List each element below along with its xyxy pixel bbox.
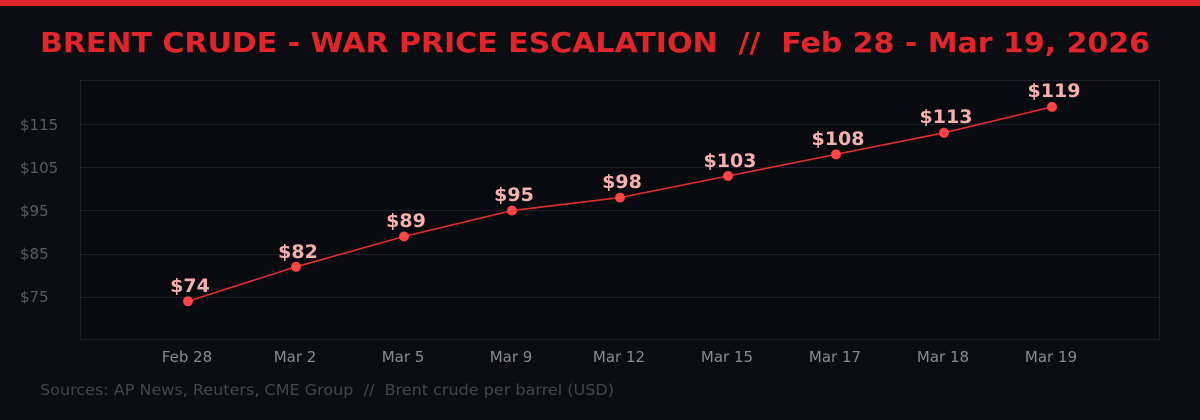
value labels: $95 [494,184,534,206]
value labels: $113 [920,106,972,128]
value labels: $103 [704,150,756,172]
value labels [170,80,1080,297]
value labels: $89 [386,210,426,232]
y axis labels: $115 [20,116,58,134]
value labels: $98 [602,171,642,193]
price line [188,107,1052,301]
x axis labels: Mar 9 [490,348,532,366]
top accent bar [0,0,1200,6]
sources footnote: Sources: AP News, Reuters, CME Group // Brent crude per barrel (USD) [40,381,614,399]
y axis labels: $85 [20,245,49,263]
y axis labels: $75 [20,288,49,306]
x axis labels [162,348,1077,366]
x axis labels: Mar 5 [382,348,424,366]
title: BRENT CRUDE - WAR PRICE ESCALATION // Feb 28 - Mar 19, 2026 [40,26,1150,59]
y axis labels: $105 [20,159,58,177]
x axis labels: Mar 15 [701,348,753,366]
value labels: $108 [812,128,864,150]
x axis labels: Mar 17 [809,348,861,366]
x axis labels: Feb 28 [162,348,212,366]
value labels: $74 [170,275,210,297]
chart: Brent price line [20,80,1160,366]
data points [183,102,1057,306]
value labels: $82 [278,241,318,263]
x axis labels: Mar 2 [274,348,316,366]
value labels: $119 [1028,80,1080,102]
x axis labels: Mar 12 [593,348,645,366]
x axis labels: Mar 19 [1025,348,1077,366]
y axis labels: $95 [20,202,49,220]
y axis labels [20,116,58,306]
x axis labels: Mar 18 [917,348,969,366]
